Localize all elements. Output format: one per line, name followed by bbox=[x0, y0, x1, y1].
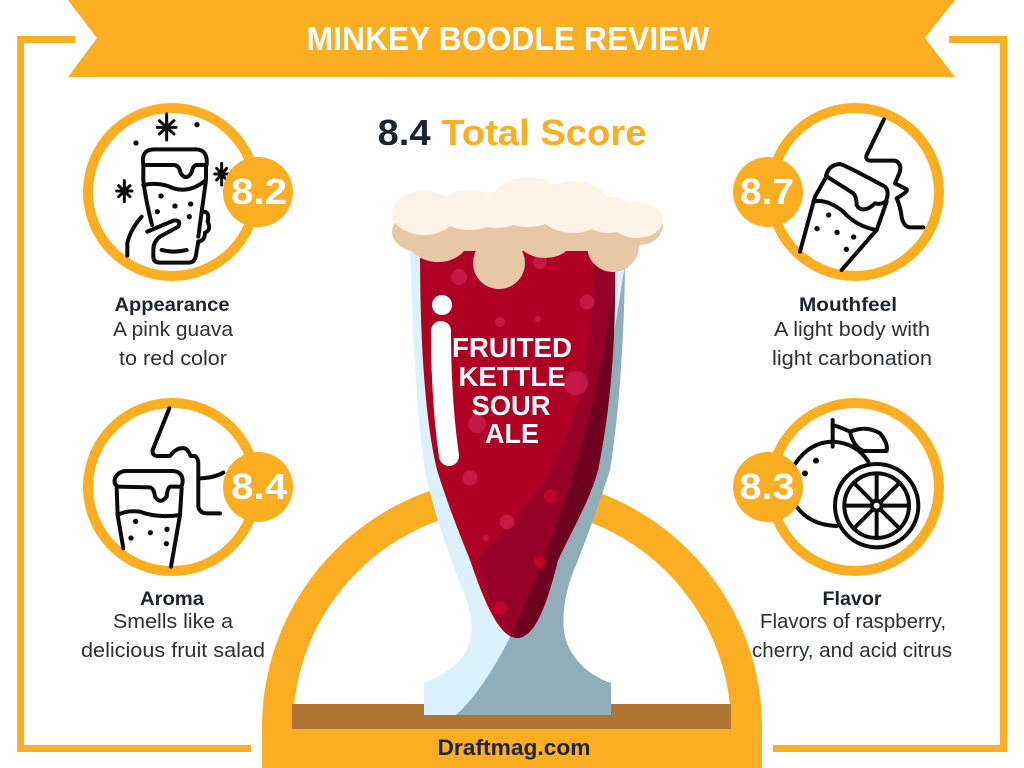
icon: orange and citrus slice bbox=[795, 420, 918, 547]
beer liquid bbox=[420, 250, 615, 638]
flavor score badge: 8.3 bbox=[740, 466, 794, 507]
mouthfeel ring bbox=[771, 108, 939, 276]
appearance text: to red color bbox=[119, 348, 227, 370]
aroma text: Aroma bbox=[140, 589, 204, 610]
icon: lips sipping beer bbox=[800, 119, 923, 270]
beer style label: KETTLE bbox=[458, 361, 566, 392]
foam bbox=[392, 205, 663, 289]
beer style label: SOUR bbox=[472, 390, 550, 421]
appearance score badge bbox=[223, 157, 293, 227]
aroma ring bbox=[88, 403, 256, 571]
appearance ring bbox=[88, 108, 256, 276]
panel: mouthfeel bbox=[733, 108, 939, 370]
aroma score badge bbox=[223, 452, 293, 522]
arch and base band bbox=[262, 477, 762, 768]
bubbles bbox=[451, 255, 594, 541]
beer style label bbox=[452, 332, 572, 449]
mouthfeel score badge: 8.7 bbox=[740, 171, 794, 212]
icon: beer held in hand bbox=[117, 114, 229, 263]
beer glass illustration bbox=[392, 177, 663, 715]
title banner: MINKEY BOODLE REVIEW bbox=[306, 20, 710, 57]
appearance text: Appearance bbox=[114, 295, 230, 316]
glass highlight bbox=[432, 295, 452, 456]
flavor ring bbox=[771, 403, 939, 571]
panel: flavor bbox=[733, 403, 952, 662]
mouthfeel text bbox=[772, 295, 932, 370]
flavor score badge bbox=[733, 452, 803, 522]
flavor text: cherry, and acid citrus bbox=[752, 640, 952, 662]
total score heading: 8.4 Total Score bbox=[378, 112, 646, 153]
mouthfeel score badge bbox=[733, 157, 803, 227]
beer style label: FRUITED bbox=[452, 332, 572, 363]
flavor text bbox=[752, 589, 952, 662]
aroma text bbox=[81, 589, 265, 662]
aroma text: delicious fruit salad bbox=[81, 640, 265, 662]
mouthfeel text: A light body with bbox=[774, 319, 930, 341]
appearance text bbox=[113, 295, 234, 370]
flavor text: Flavor bbox=[822, 589, 882, 610]
aroma score badge: 8.4 bbox=[231, 466, 287, 507]
panel: appearance bbox=[88, 108, 293, 370]
appearance score badge: 8.2 bbox=[231, 171, 287, 212]
mouthfeel text: Mouthfeel bbox=[799, 295, 897, 316]
icon: nose smelling beer bbox=[115, 408, 223, 567]
flavor text: Flavors of raspberry, bbox=[760, 611, 946, 633]
title banner bbox=[68, 0, 955, 77]
beer style label: ALE bbox=[485, 418, 539, 449]
glass body bbox=[410, 250, 625, 715]
appearance text: A pink guava bbox=[113, 319, 234, 341]
panel: aroma bbox=[81, 403, 293, 662]
aroma text: Smells like a bbox=[113, 611, 234, 633]
source credit: Draftmag.com bbox=[438, 735, 590, 760]
mouthfeel text: light carbonation bbox=[772, 348, 932, 370]
